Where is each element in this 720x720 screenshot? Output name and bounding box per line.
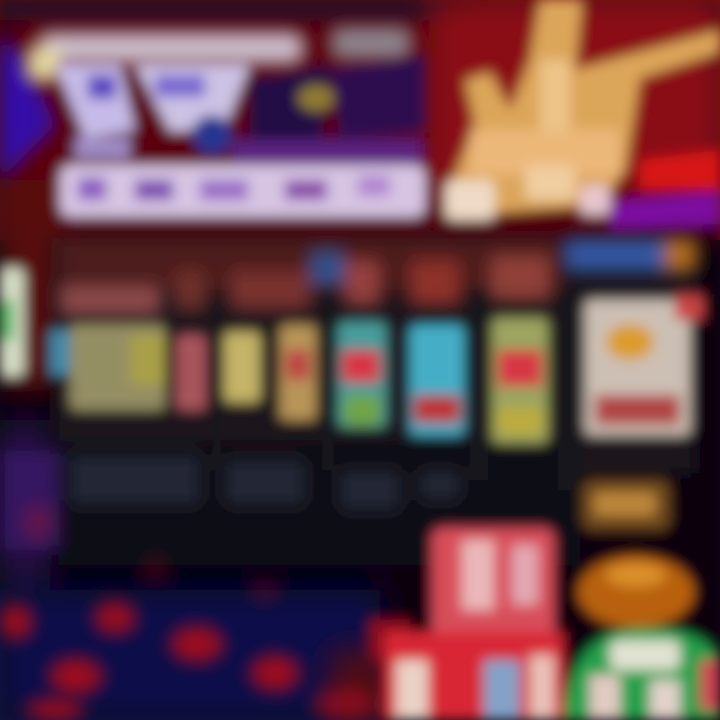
slot machine row	[50, 238, 703, 565]
red and white chip stack	[370, 528, 563, 720]
title top line	[28, 28, 410, 80]
gold plaque	[582, 480, 670, 530]
title bottom line	[60, 138, 425, 217]
left edge screen	[0, 268, 24, 376]
orange chip	[578, 556, 694, 628]
machine tops	[60, 240, 695, 315]
machine screens	[50, 295, 703, 443]
left purple panel	[0, 450, 60, 550]
title graphic	[28, 28, 425, 217]
title emblem	[55, 55, 425, 155]
purple glow left	[0, 35, 55, 180]
golden crown	[445, 0, 720, 220]
floor with red spots	[0, 558, 375, 720]
machine lower panels	[70, 455, 460, 510]
green and white chip	[563, 628, 720, 720]
red and purple stripe right	[610, 150, 720, 228]
machine bodies	[55, 238, 695, 565]
dark machine dividers	[212, 290, 578, 490]
